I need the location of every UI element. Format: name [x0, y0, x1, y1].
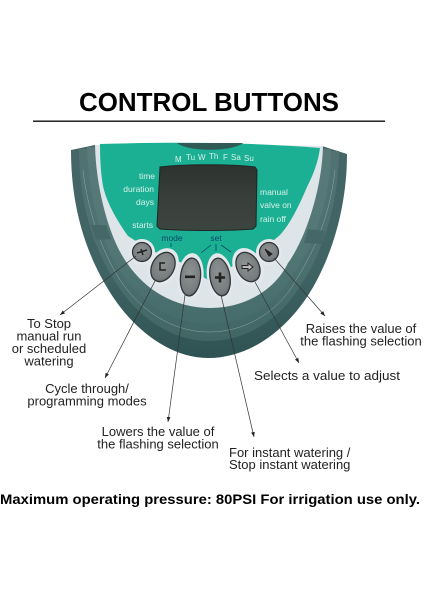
right mode labels: rain off: [260, 214, 286, 224]
top notch: [177, 143, 243, 150]
middle shell band: [79, 149, 339, 341]
LCD screen: [157, 165, 257, 230]
label: lowers: [97, 424, 219, 452]
label: raises: [300, 321, 422, 348]
set label: [201, 233, 231, 253]
button: plus: [207, 257, 233, 297]
label: lowers: Lowers the value of: [102, 424, 215, 439]
right mode labels: [260, 187, 292, 224]
left mode labels: time: [139, 171, 155, 181]
side slots: [91, 225, 111, 240]
day labels: F: [223, 153, 228, 162]
button: stop: [132, 242, 152, 262]
label: stop: To Stop: [27, 316, 71, 331]
label: cycle: [27, 381, 147, 408]
controller device: [71, 143, 347, 358]
footer note: Maximum operating pressure: 80PSI For irrigation use only.: [0, 491, 420, 507]
button: mode cycle: [146, 248, 180, 286]
arrow: select button: [255, 282, 299, 363]
label: stop: manual run: [16, 328, 82, 344]
button: select arrow: [231, 248, 265, 286]
title: CONTROL BUTTONS: [79, 89, 339, 117]
label: cycle: Cycle through/: [45, 381, 129, 396]
set label: set: [210, 233, 222, 243]
left mode labels: [123, 171, 155, 230]
white faceplate band: [95, 145, 323, 308]
label: raises: the flashing selection: [300, 334, 422, 348]
left mode labels: days: [136, 197, 154, 207]
label: instant watering: Stop instant watering: [229, 457, 350, 472]
day labels: W: [198, 153, 206, 162]
label: instant watering: For instant watering /: [229, 445, 351, 460]
label: lowers: the flashing selection: [97, 436, 219, 452]
arrow: raise button: [274, 258, 325, 316]
right mode labels: manual: [260, 187, 288, 197]
button: minus: [179, 257, 202, 297]
left mode labels: starts: [132, 220, 153, 230]
day labels: [175, 152, 254, 164]
mode label: mode: [161, 233, 183, 243]
arrow: mode button: [105, 281, 155, 378]
day labels: Th: [209, 152, 218, 161]
label: stop: [12, 316, 86, 368]
label: cycle: programming modes: [27, 394, 147, 408]
day labels: M: [175, 155, 182, 164]
arrow: minus button: [168, 295, 185, 422]
arrow: plus button: [221, 295, 254, 437]
day labels: Tu: [186, 153, 195, 162]
device outer shell: [71, 145, 347, 358]
right mode labels: valve on: [260, 200, 292, 210]
left mode labels: duration: [123, 184, 154, 194]
label: stop: or scheduled: [12, 341, 86, 356]
green panel: [100, 143, 320, 280]
label: stop: watering: [23, 354, 74, 368]
arrow: stop button: [60, 256, 136, 315]
label: instant watering: [229, 445, 351, 472]
label: selects: Selects a value to adjust: [254, 368, 400, 383]
label: raises: Raises the value of: [306, 321, 417, 336]
inner shell band: [87, 147, 331, 324]
day labels: Sa: [231, 153, 241, 162]
button halos: [129, 239, 282, 303]
button: raise: [260, 242, 278, 262]
day labels: Su: [244, 154, 254, 163]
